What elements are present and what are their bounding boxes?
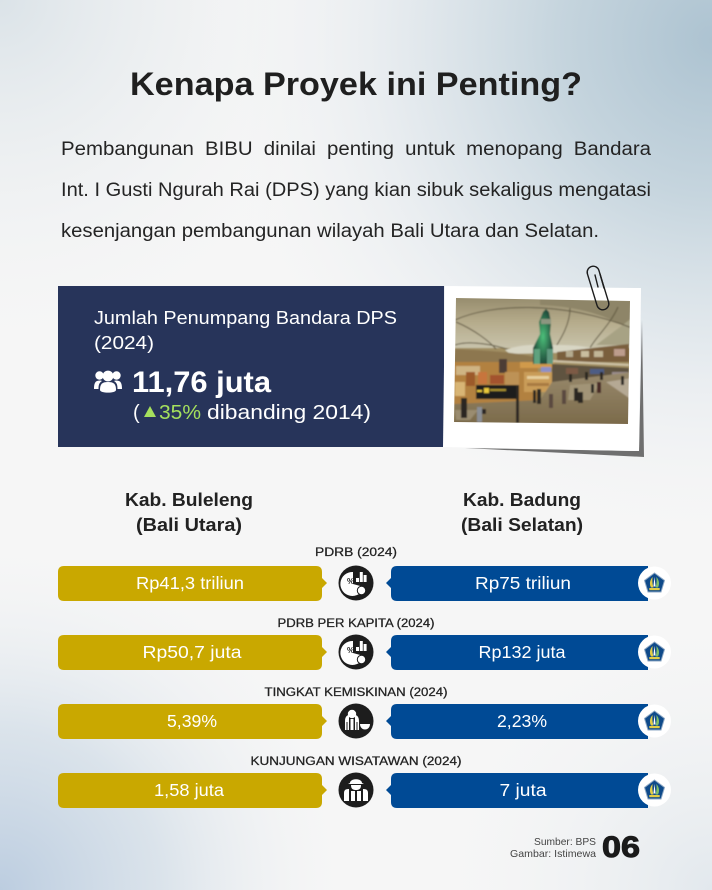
left bar: Rp41,3 triliun <box>136 573 244 593</box>
people <box>461 372 624 422</box>
right mezzanine <box>557 344 629 362</box>
row label: PDRB (2024) <box>315 547 397 559</box>
right bar: 2,23% <box>497 711 547 731</box>
left bar <box>58 773 327 808</box>
icon: paperclip <box>586 265 610 311</box>
right bar <box>386 704 648 739</box>
passenger count: 11,76 juta <box>132 366 271 399</box>
card shadow <box>465 320 644 457</box>
card <box>443 286 641 451</box>
intro paragraph <box>61 139 651 242</box>
intro paragraph: Int. I Gusti Ngurah Rai (DPS) yang kian sibuk sekaligus mengatasi <box>61 180 651 201</box>
panel heading: (2024) <box>94 333 154 353</box>
left column heading <box>125 490 253 535</box>
growth comparison: ( <box>133 402 140 424</box>
source credit: Sumber: BPS <box>534 836 596 848</box>
left bar: Rp50,7 juta <box>142 642 242 662</box>
right bar <box>386 635 648 670</box>
panel: passenger statistics <box>58 286 444 447</box>
intro paragraph: Pembangunan BIBU dinilai penting untuk menopang Bandara <box>61 139 651 160</box>
icon: tourist <box>338 772 374 808</box>
growth comparison: 35% <box>159 402 201 424</box>
source credit: Gambar: Istimewa <box>510 848 596 860</box>
photo card <box>443 265 644 457</box>
left bar <box>58 704 327 739</box>
left mezzanine <box>455 349 534 362</box>
icon: emblem <box>638 774 671 806</box>
left bar <box>58 635 327 670</box>
icon: people <box>94 371 122 393</box>
right bar: Rp132 juta <box>478 642 566 662</box>
panel heading: Jumlah Penumpang Bandara DPS <box>94 308 397 328</box>
left shops <box>454 362 538 405</box>
right column heading: (Bali Selatan) <box>461 515 583 535</box>
title: Kenapa Proyek ini Penting? <box>130 66 582 102</box>
tower <box>533 309 553 364</box>
panel heading <box>94 308 397 353</box>
page number: 06 <box>602 831 640 864</box>
growth comparison <box>133 402 371 424</box>
right bar <box>386 566 648 601</box>
row: PDRB <box>58 547 671 601</box>
growth comparison: dibanding 2014) <box>207 402 371 424</box>
airport photo <box>450 296 635 426</box>
right bar: Rp75 triliun <box>475 573 571 593</box>
right bar <box>386 773 648 808</box>
right column heading <box>461 490 583 535</box>
right concourse <box>551 363 629 382</box>
icon: emblem <box>638 566 671 600</box>
icon: emblem <box>638 704 671 738</box>
row: kunjungan wisatawan <box>58 756 671 808</box>
row: tingkat kemiskinan <box>58 687 671 739</box>
icon: economy <box>338 566 374 600</box>
left column heading: (Bali Utara) <box>136 515 242 535</box>
icon: person with bowl <box>338 704 374 738</box>
row label: TINGKAT KEMISKINAN (2024) <box>264 687 448 699</box>
right bar: 7 juta <box>500 780 547 800</box>
left bar <box>58 566 327 601</box>
left bar: 1,58 juta <box>154 780 224 800</box>
ceiling <box>450 296 635 348</box>
right column heading: Kab. Badung <box>463 490 581 510</box>
left column heading: Kab. Buleleng <box>125 490 253 510</box>
icon: emblem <box>638 636 671 668</box>
source credit <box>510 836 596 860</box>
sign <box>476 385 516 399</box>
icon: economy <box>338 634 374 670</box>
row label: PDRB PER KAPITA (2024) <box>278 618 435 630</box>
floor <box>454 372 632 426</box>
intro paragraph: kesenjangan pembangunan wilayah Bali Utara dan Selatan. <box>61 221 599 242</box>
row: PDRB per kapita <box>58 618 671 670</box>
row label: KUNJUNGAN WISATAWAN (2024) <box>250 756 462 768</box>
left bar: 5,39% <box>167 711 217 731</box>
